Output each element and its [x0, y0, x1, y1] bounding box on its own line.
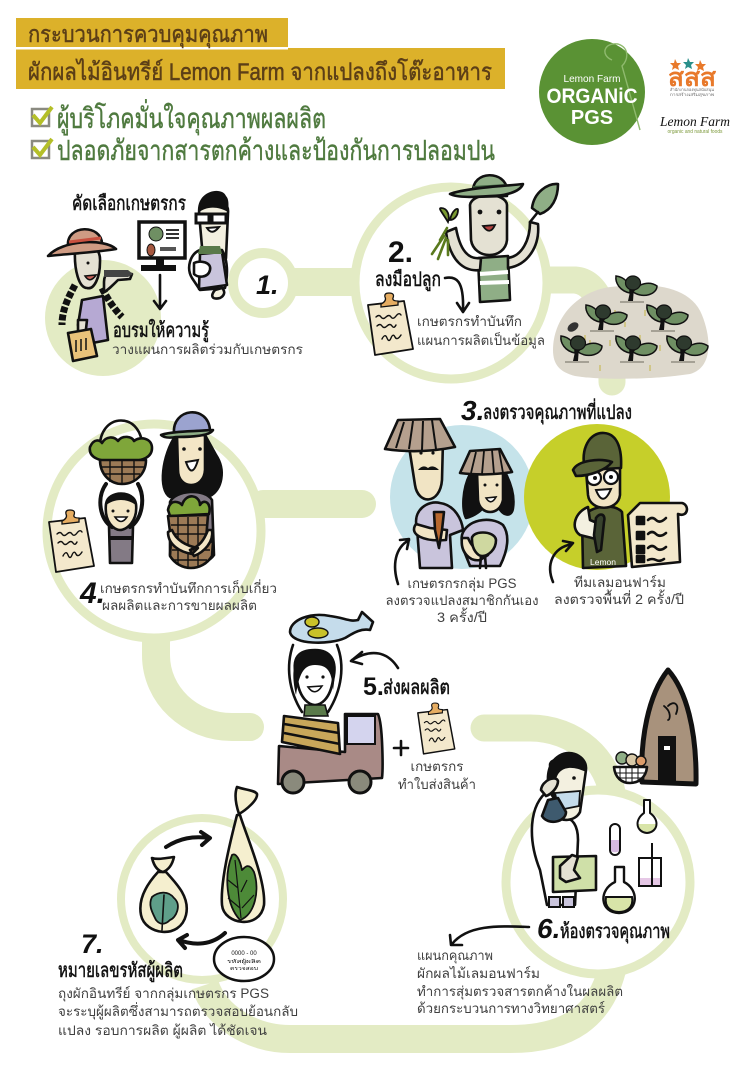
logo: ThaiHealth: สสส	[668, 64, 717, 92]
figure: woman holding produce bag	[289, 612, 373, 716]
figure: Lemon Farm inspector	[573, 433, 687, 568]
step 2: planting	[368, 175, 708, 379]
arrow: to group farmers	[395, 539, 409, 584]
number 1: 1.	[256, 270, 279, 300]
illustration: small produce bag	[140, 857, 187, 932]
label: producer code tag: 0000 - 00	[231, 951, 257, 957]
illustration: truck	[278, 714, 383, 793]
title banner: กระบวนการควบคุมคุณภาพ	[28, 21, 268, 48]
text: PGS group inspection: เกษตรกรกลุ่ม PGS	[408, 576, 516, 592]
text: lab description: แผนกคุณภาพ	[417, 948, 493, 964]
text: lab description: ด้วยกระบวนการทางวิทยาศาสตร์	[417, 1000, 605, 1016]
figure: farmer with sprout and trowel	[432, 175, 558, 302]
icon: clipboard	[368, 293, 413, 355]
heading: plant: ลงมือปลูก	[375, 269, 441, 292]
number 5: 5.	[363, 673, 384, 701]
illustration: vegetable basket	[614, 752, 647, 783]
logo: Lemon Farm: Lemon Farm	[659, 115, 730, 130]
step 1: select farmers	[48, 191, 303, 361]
number 3: 3.	[461, 395, 484, 426]
text: production plan data: แผนการผลิตเป็นข้อมูล	[417, 331, 545, 349]
text: harvest record: เกษตรกรทำบันทึกการเก็บเกี่ยว	[100, 579, 277, 596]
arrow: tall bag to small bag	[178, 933, 225, 948]
illustration: farm plot	[553, 276, 708, 379]
text: farmer makes delivery slip: เกษตรกร	[410, 759, 464, 774]
text: producer code description: ถุงผักอินทรีย์ จากกลุ่มเกษตรกร PGS	[58, 985, 269, 1002]
icon: clipboard	[49, 510, 94, 572]
circle: Lemon Farm inspection	[524, 424, 670, 570]
figure: staff with glasses	[189, 191, 228, 299]
heading: producer code: หมายเลขรหัสผู้ผลิต	[58, 960, 183, 983]
step 6: laboratory	[417, 670, 696, 1016]
label: producer code tag: ตรวจสอบ	[230, 966, 258, 972]
text: Lemon Farm team inspection: ลงตรวจพื้นที่ 2 ครั้ง/ปี	[554, 589, 684, 607]
step 7: producer code	[58, 787, 298, 1039]
text: Lemon Farm team inspection: ทีมเลมอนฟาร์ม	[574, 574, 666, 590]
heading: select farmers: คัดเลือกเกษตรกร	[72, 193, 186, 215]
text: producer code description: จะระบุผู้ผลิตซึ่งสามารถตรวจสอบย้อนกลับ	[58, 1002, 298, 1020]
arrow: small bag to tall bag	[166, 832, 210, 847]
arrow: to record text	[445, 278, 469, 312]
text: lab description: ทำการสุ่มตรวจสารตกค้างในผลผลิต	[417, 983, 623, 1000]
benefit checklist: ผู้บริโภคมั่นใจคุณภาพผลผลิต	[57, 99, 326, 136]
logo: ThaiHealth: การสร้างเสริมสุขภาพ	[670, 92, 714, 98]
logo: Lemon Farm Organic PGS: Lemon Farm	[564, 73, 621, 85]
number 7: 7.	[81, 929, 104, 959]
number 6: 6.	[537, 913, 560, 944]
illustration: lab glassware	[603, 800, 661, 913]
heading: training: อบรมให้ความรู้	[113, 319, 209, 343]
number 2: 2.	[388, 236, 413, 269]
logo: ThaiHealth: สำนักงานกองทุนสนับสนุน	[670, 87, 714, 93]
text: PGS group inspection	[386, 576, 538, 625]
icon: clipboard	[418, 703, 455, 754]
logo: Lemon Farm Organic PGS: PGS	[571, 107, 613, 129]
text: farmer makes delivery slip: ทำใบส่งสินค้า	[398, 776, 476, 792]
figure: child with basket on head	[90, 420, 152, 563]
title banner	[16, 18, 505, 89]
logo: Lemon Farm Organic PGS	[539, 39, 645, 145]
illustration: tall produce bag	[222, 787, 264, 922]
text: producer code description	[58, 985, 298, 1039]
logo: Lemon Farm: organic and natural foods	[668, 129, 723, 135]
circle: group inspection	[390, 425, 534, 569]
title banner: ผักผลไม้อินทรีย์ Lemon Farm จากแปลงถึงโต๊ะอาหาร	[28, 58, 492, 86]
heading: inspect plot: ลงตรวจคุณภาพที่แปลง	[483, 398, 632, 425]
figure: farmer woman with hat and braids	[48, 229, 133, 361]
step 3: on-farm inspection	[385, 395, 687, 625]
figure: lab scientist	[532, 752, 596, 907]
text: producer code description: แปลง รอบการผลิต ผู้ผลิต ได้ชัดเจน	[58, 1023, 267, 1039]
figure: Lemon Farm inspector: Lemon	[590, 558, 616, 567]
arrow: to inspector	[550, 541, 573, 582]
logo: Lemon Farm Organic PGS: ORGANiC	[546, 85, 638, 108]
figure: female farmer	[460, 449, 513, 568]
label: producer code tag	[214, 937, 274, 981]
icon: plus	[394, 741, 408, 755]
arrow: monitor to training	[154, 275, 166, 309]
arrow: to woman	[351, 652, 398, 668]
connector path behind steps	[45, 187, 690, 1039]
figure: woman with hat and basket	[161, 412, 222, 568]
text: Lemon Farm team inspection	[554, 574, 684, 607]
heading: quality lab: ห้องตรวจคุณภาพ	[560, 921, 670, 944]
heading: deliver: ส่งผลผลิต	[383, 677, 450, 699]
text: farmer records: เกษตรกรทำบันทึก	[417, 314, 522, 329]
figure: male farmer	[385, 419, 463, 568]
text: PGS group inspection: ลงตรวจแปลงสมาชิกกันเอง	[386, 593, 538, 608]
step 4: harvest records	[49, 412, 277, 613]
text: lab description	[417, 948, 623, 1016]
icon: monitor with chart	[139, 222, 185, 271]
step 5: delivery	[278, 612, 476, 793]
text: yield and sales: ผลผลิตและการขายผลผลิต	[102, 598, 257, 613]
illustration: hut	[642, 670, 696, 784]
text: farmer makes delivery slip	[398, 759, 476, 792]
text: PGS group inspection: 3 ครั้ง/ปี	[437, 607, 487, 625]
logo: ThaiHealth	[668, 58, 717, 98]
benefit checklist	[32, 99, 495, 166]
arrow: to lab text	[450, 926, 529, 945]
text: plan production: วางแผนการผลิตร่วมกับเกษตรกร	[112, 342, 303, 357]
text: lab description: ผักผลไม้เลมอนฟาร์ม	[417, 965, 540, 981]
number 4: 4.	[79, 577, 105, 610]
benefit checklist: ปลอดภัยจากสารตกค้างและป้องกันการปลอมปน	[57, 135, 495, 166]
label: producer code tag: รหัสผู้ผลิต	[227, 958, 261, 965]
